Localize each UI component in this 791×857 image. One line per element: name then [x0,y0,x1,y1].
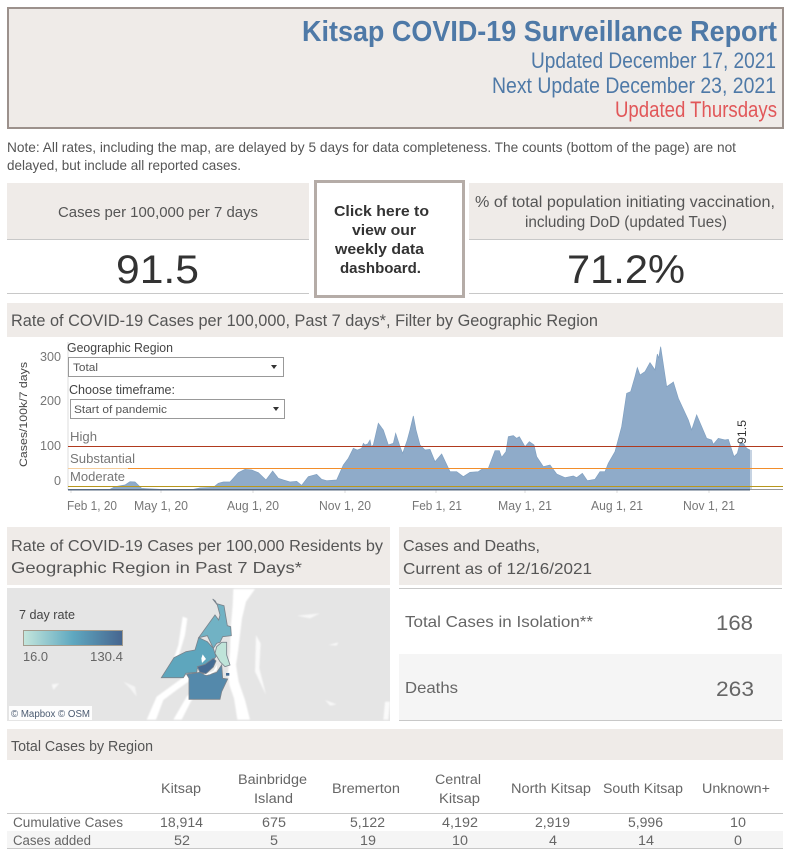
Blake Island [226,673,229,676]
row: cumulative cases: 4,192 [442,815,478,830]
column headers: Island [254,791,293,806]
filter: geographic region: Geographic Region [67,341,173,355]
row: cumulative cases: 10 [730,815,746,830]
heading: cases and deaths [403,538,592,578]
region: South Kitsap [187,665,228,699]
panel: vaccination [469,183,783,294]
water [52,589,390,720]
row: cumulative cases: 18,914 [160,815,204,830]
deaths row: Deaths [405,680,458,697]
y axis title: Cases/100k/7 days [18,361,30,467]
title banner [8,8,783,128]
column headers: North Kitsap [511,781,591,796]
threshold labels [70,430,135,484]
column headers: Bainbridge [238,772,307,787]
cases value: 91.5 [116,248,199,292]
row: cases added: 52 [174,833,190,848]
heading: total cases by region [7,729,783,760]
row: cumulative cases: 5,122 [350,815,385,830]
x axis: Aug 1, 21 [591,499,643,513]
x axis: Nov 1, 21 [683,499,735,513]
note text: delayed, but include all reported cases. [7,157,241,173]
threshold labels: Moderate [70,470,125,484]
panel: cases and deaths [399,527,782,721]
x axis: Feb 1, 21 [412,499,462,513]
column headers: Unknown+ [702,781,770,796]
heading: cases and deaths: Cases and Deaths, [403,538,540,555]
column headers: Kitsap [161,781,201,796]
row: cases added: Cases added [13,833,91,848]
column headers: Bremerton [332,781,400,796]
x axis: May 1, 20 [134,499,188,513]
note text [7,139,736,173]
row: cases added: 19 [360,833,376,848]
dashboard link button: dashboard. [340,260,421,277]
column headers [161,772,770,806]
y axis: 300 [40,349,61,364]
note text: Note: All rates, including the map, are delayed by 5 days for data completeness. The counts (bottom of the page) are not [7,139,736,155]
area outline: right half [400,347,750,481]
heading: rate chart [7,303,783,337]
heading: map: Rate of COVID-19 Cases per 100,000 Residents by [11,538,383,555]
row: cumulative cases: 675 [262,815,286,830]
column headers: South Kitsap [603,781,683,796]
vaccination label: % of total population initiating vaccination, [475,194,775,211]
x axis: Nov 1, 20 [319,499,371,513]
region polygons [161,599,231,699]
filter: timeframe: Choose timeframe: [69,383,175,397]
x axis: Aug 1, 20 [227,499,279,513]
threshold labels: High [70,430,97,444]
legend: 16.0 [23,650,48,664]
chart axis ticks [68,342,709,493]
panel: cases per 100,000 [7,183,309,294]
area chart [18,341,783,513]
cases label: Cases per 100,000 per 7 days [58,204,258,221]
dashboard link button [316,182,464,296]
area: right half [400,347,750,489]
row: cumulative cases: 2,919 [535,815,570,830]
legend: 130.4 [90,650,123,664]
threshold labels: Substantial [70,452,135,466]
column headers: Kitsap [439,791,480,806]
row: cases added: 5 [270,833,278,848]
isolation row [405,612,753,635]
y axis: 100 [40,438,61,453]
region: Central Kitsap [161,638,216,678]
threshold lines [68,446,783,487]
row: cumulative cases: Cumulative Cases [13,815,123,830]
x axis: May 1, 21 [498,499,552,513]
map [7,588,390,721]
inlet: Sinclair Inlet [203,664,217,675]
legend: 7 day rate [19,608,75,622]
map attribution: © Mapbox © OSM [11,709,90,720]
row: cases added: 10 [452,833,468,848]
dashboard link button: weekly data [334,241,425,258]
inlet: Dyes Inlet [201,654,206,663]
area: left half [68,423,400,489]
table: cases by region [7,772,783,849]
area outline: left half [68,423,400,489]
deaths row [405,678,754,701]
x axis [67,499,735,513]
latest value label: 91.5 [737,420,749,444]
heading: map: Geographic Region in Past 7 Days* [11,560,302,577]
y axis: 0 [54,473,61,488]
dashboard link button: Click here to [334,203,429,220]
deaths row: 263 [716,678,754,701]
vaccination label: including DoD (updated Tues) [525,214,727,231]
row: cumulative cases: 5,996 [628,815,663,830]
column headers: Central [435,772,481,787]
axis baseline [68,489,750,490]
row: cases added [13,833,742,848]
row: cumulative cases [13,815,746,830]
vaccination value: 71.2% [567,248,685,292]
vaccination label [475,194,775,231]
legend [19,608,123,664]
row: cases added: 0 [734,833,742,848]
heading: total cases by region: Total Cases by Region [11,738,153,755]
filter: geographic region: Total [73,362,98,374]
filter: geographic region [67,341,284,376]
heading: map [7,527,390,585]
dashboard link button: view our [352,222,416,239]
x axis: Feb 1, 20 [67,499,117,513]
y axis [40,349,61,488]
row: cases added: 4 [549,833,558,848]
row: cases added: 14 [638,833,655,848]
filter: timeframe [69,383,284,418]
y axis: 200 [40,393,61,408]
region: Bainbridge Island [215,642,230,667]
region: North Kitsap [199,599,231,648]
filter: timeframe: Start of pandemic [74,404,168,416]
isolation row: Total Cases in Isolation** [405,614,593,631]
region: Bremerton [197,658,216,674]
heading: rate chart: Rate of COVID-19 Cases per 100,000, Past 7 days*, Filter by Geographic Region [11,312,598,330]
heading: cases and deaths: Current as of 12/16/2021 [403,561,592,578]
isolation row: 168 [716,612,753,635]
